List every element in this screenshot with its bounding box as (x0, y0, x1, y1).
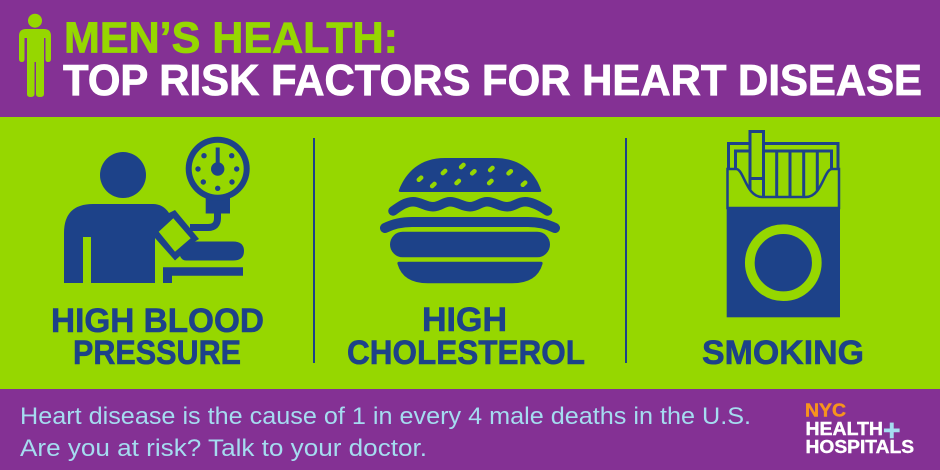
icon: blood pressure check (64, 137, 250, 283)
bottom bun (397, 262, 543, 283)
label: high blood pressure: HIGH BLOOD (51, 302, 264, 340)
label: high blood pressure: PRESSURE (73, 334, 241, 372)
label: high blood pressure (51, 302, 264, 372)
logo: NYC Health + Hospitals: + (883, 414, 901, 448)
logo: NYC Health + Hospitals: HEALTH (806, 419, 883, 439)
gauge neck (206, 195, 230, 214)
top bun (399, 158, 541, 192)
pack body (727, 208, 840, 317)
text: footer message (20, 403, 751, 462)
panel: header band (0, 0, 940, 117)
icon: hamburger (385, 158, 555, 283)
text: footer message: Heart disease is the cause of 1 in every 4 male deaths in the U.S. (20, 403, 751, 430)
cheese strip (385, 222, 555, 228)
sesame seeds (419, 165, 525, 186)
text: footer message: Are you at risk? Talk to your doctor. (20, 435, 427, 462)
ring logo (750, 229, 817, 296)
label: high cholesterol (347, 301, 585, 372)
panel: green risk factors band (0, 117, 940, 389)
person head (100, 152, 146, 198)
lettuce (393, 202, 548, 211)
heading: top risk factors: TOP RISK FACTORS FOR HEART DISEASE (63, 56, 922, 105)
label: high cholesterol: CHOLESTEROL (347, 334, 585, 372)
logo: NYC Health + Hospitals: NYC (805, 400, 846, 420)
pack front opening (728, 169, 839, 208)
logo: NYC Health + Hospitals: HOSPITALS (806, 437, 914, 457)
person body, arm and forearm (64, 204, 244, 283)
tube (190, 212, 218, 228)
arm rest (163, 267, 243, 283)
icon: cigarette pack (727, 132, 840, 317)
label: high cholesterol: HIGH (422, 301, 507, 339)
cuff (159, 218, 191, 252)
cigarettes (728, 132, 838, 197)
panel: footer band (0, 389, 940, 470)
logo: NYC Health + Hospitals (805, 400, 914, 457)
gauge dial (186, 137, 250, 201)
heading: men's health: MEN’S HEALTH: (64, 14, 398, 62)
icon: man figure (19, 14, 51, 97)
patty (390, 232, 550, 257)
label: smoking: SMOKING (702, 334, 864, 372)
